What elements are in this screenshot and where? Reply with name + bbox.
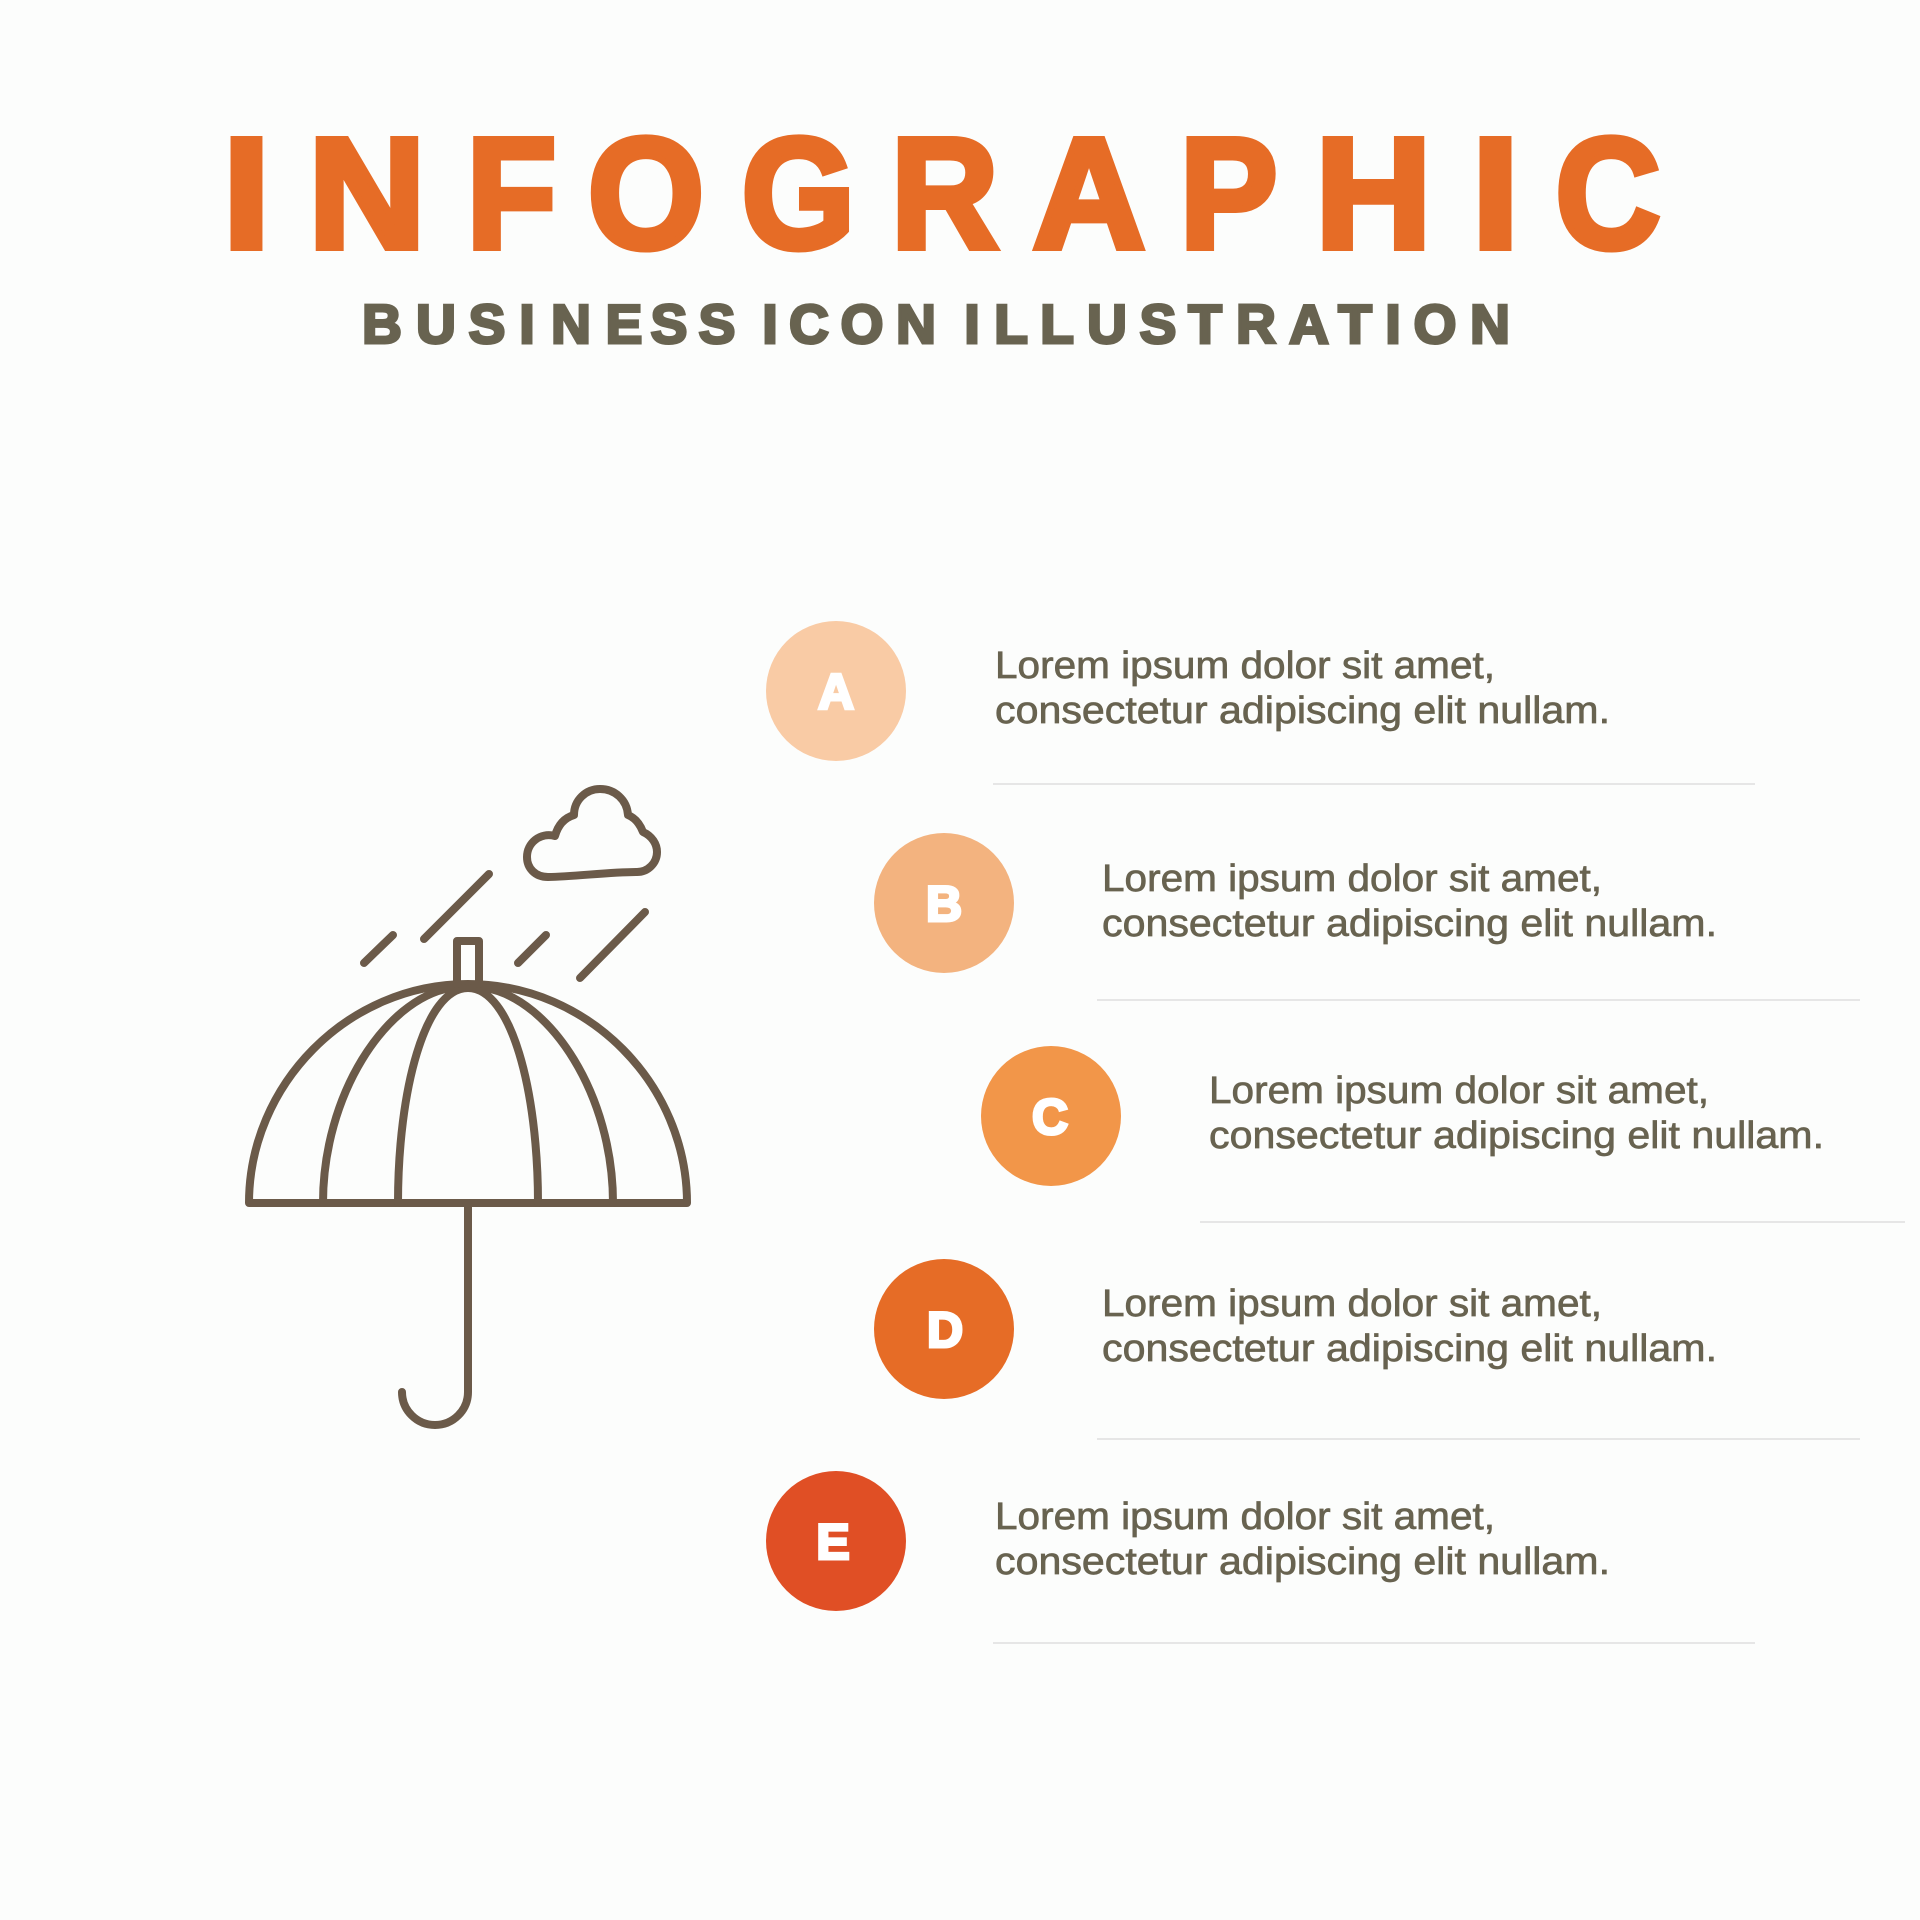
umbrella canopy	[249, 984, 687, 1203]
list item E	[766, 1471, 1755, 1643]
badge C: C	[1032, 1089, 1068, 1145]
title: G	[742, 106, 855, 282]
badge B	[874, 833, 1014, 973]
subtitle: BUSINESS ICON ILLUSTRATION	[362, 293, 1510, 355]
umbrella ribs	[323, 988, 613, 1203]
title: R	[891, 106, 998, 282]
list item D	[874, 1259, 1860, 1439]
umbrella top knob	[457, 941, 479, 984]
title: F	[467, 106, 556, 282]
badge A: A	[818, 664, 854, 720]
title: I	[223, 106, 270, 282]
text C: consectetur adipiscing elit nullam.	[1209, 1115, 1824, 1157]
title: I	[1472, 106, 1519, 282]
badge D: D	[927, 1302, 963, 1358]
text D: Lorem ipsum dolor sit amet,	[1102, 1283, 1602, 1325]
cloud	[527, 789, 657, 877]
text E: consectetur adipiscing elit nullam.	[995, 1541, 1610, 1583]
title: A	[1033, 106, 1145, 282]
text C: Lorem ipsum dolor sit amet,	[1209, 1070, 1709, 1112]
list item C	[981, 1046, 1905, 1222]
umbrella handle	[402, 1203, 468, 1425]
text A: consectetur adipiscing elit nullam.	[995, 690, 1610, 732]
badge B: B	[926, 876, 962, 932]
badge E: E	[816, 1514, 850, 1570]
rain streaks	[364, 874, 645, 978]
icon: umbrella with rain cloud	[249, 789, 687, 1425]
title: C	[1556, 106, 1660, 282]
text D: consectetur adipiscing elit nullam.	[1102, 1328, 1717, 1370]
title: O	[588, 106, 704, 282]
title: P	[1180, 106, 1277, 282]
title: N	[308, 106, 426, 282]
badge D	[874, 1259, 1014, 1399]
badge E	[766, 1471, 906, 1611]
badge C	[981, 1046, 1121, 1186]
text E: Lorem ipsum dolor sit amet,	[995, 1496, 1495, 1538]
text B: consectetur adipiscing elit nullam.	[1102, 903, 1717, 945]
text A: Lorem ipsum dolor sit amet,	[995, 645, 1495, 687]
text B: Lorem ipsum dolor sit amet,	[1102, 858, 1602, 900]
list item A	[766, 621, 1755, 784]
list item B	[874, 833, 1860, 1000]
title: H	[1316, 106, 1432, 282]
badge A	[766, 621, 906, 761]
